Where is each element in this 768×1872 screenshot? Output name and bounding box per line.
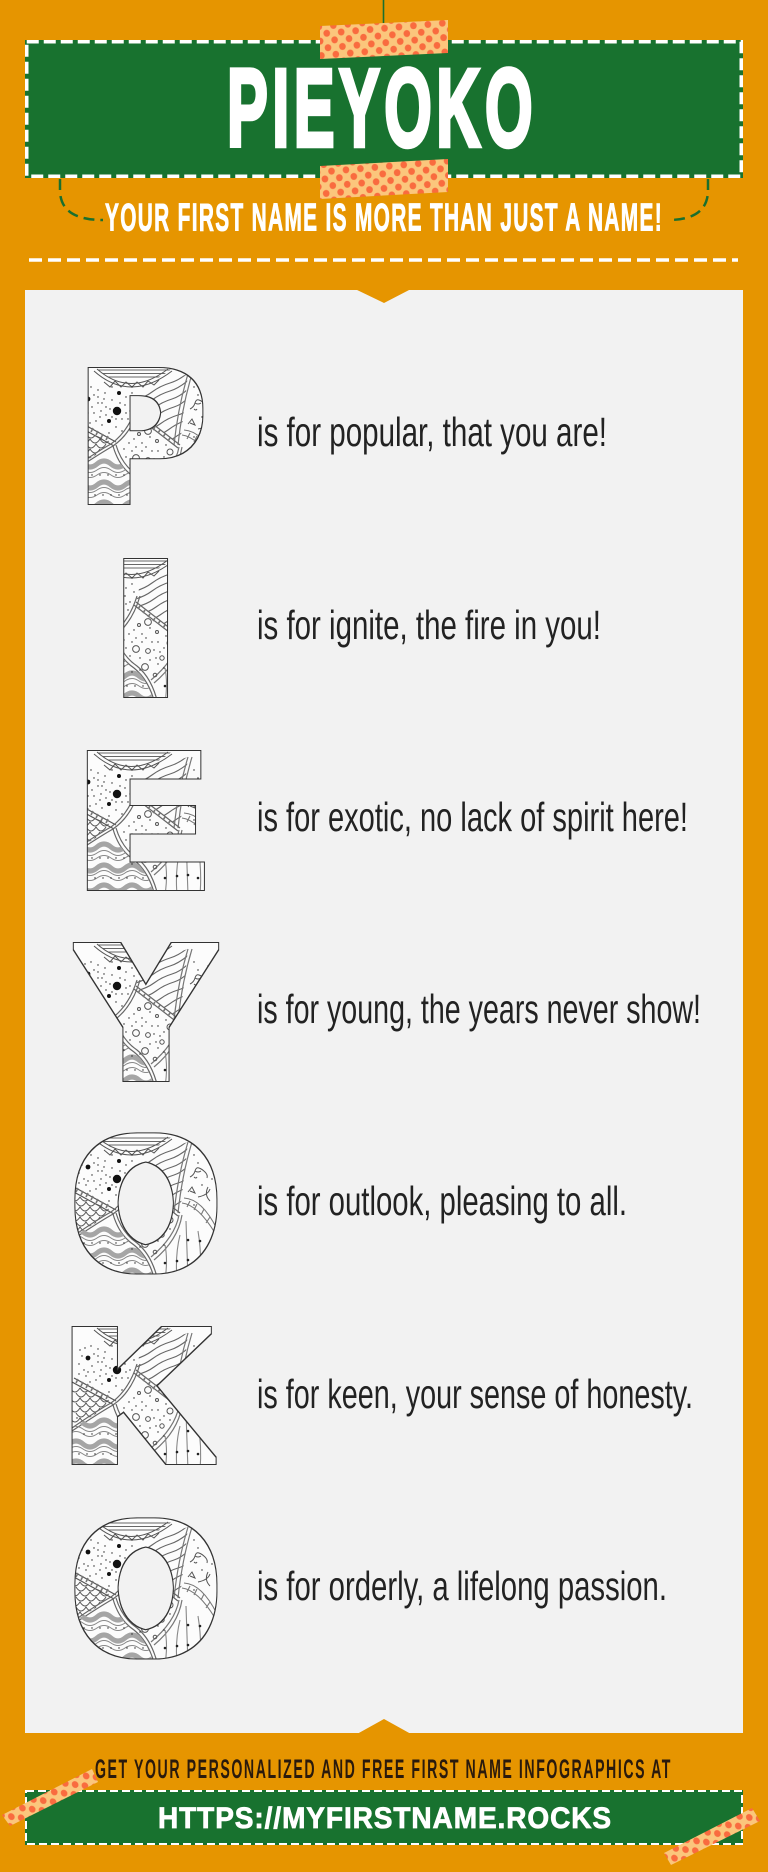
decorated letter O: O — [76, 1483, 216, 1695]
line for O: is for outlook, pleasing to all. — [257, 1178, 627, 1224]
decorated letter K: K — [67, 1290, 210, 1502]
footer banner — [25, 1790, 743, 1845]
row: letter Y — [72, 942, 698, 1082]
row: second letter O — [74, 1517, 664, 1660]
decorated letter Y: Y — [78, 904, 214, 1119]
title: PIEYOKO — [227, 47, 537, 170]
white dashed divider — [29, 258, 738, 262]
header banner — [25, 20, 743, 199]
decorated letter P — [88, 367, 204, 505]
row: letter K — [72, 1326, 690, 1465]
dashed bracket: right — [668, 179, 708, 220]
decorated letter O — [74, 1517, 218, 1660]
row: letter E — [86, 750, 686, 891]
decorated letter I — [123, 558, 168, 698]
decorated letter O: O — [76, 1098, 216, 1310]
row: letter P — [88, 367, 604, 505]
hanging string — [382, 0, 384, 26]
line for I: is for ignite, the fire in you! — [257, 602, 601, 648]
content panel — [25, 289, 743, 1734]
decorated letter E — [86, 750, 205, 891]
row: letter O — [74, 1132, 624, 1274]
decorated letter K — [72, 1326, 217, 1465]
dashed bracket: left — [60, 179, 103, 220]
decorated letter Y — [72, 942, 220, 1082]
tape: bottom — [320, 159, 448, 199]
decorated letter I: I — [120, 521, 171, 736]
row: letter I — [123, 558, 598, 698]
tape: footer right — [664, 1808, 760, 1865]
tape: top — [320, 20, 448, 59]
decorated letter P: P — [85, 331, 200, 542]
footer url: HTTPS://MYFIRSTNAME.ROCKS — [158, 1802, 612, 1835]
decorated letter O — [74, 1132, 218, 1274]
tape: footer left — [2, 1769, 98, 1826]
line for P: is for popular, that you are! — [257, 409, 607, 455]
decorated letter E: E — [84, 713, 203, 929]
